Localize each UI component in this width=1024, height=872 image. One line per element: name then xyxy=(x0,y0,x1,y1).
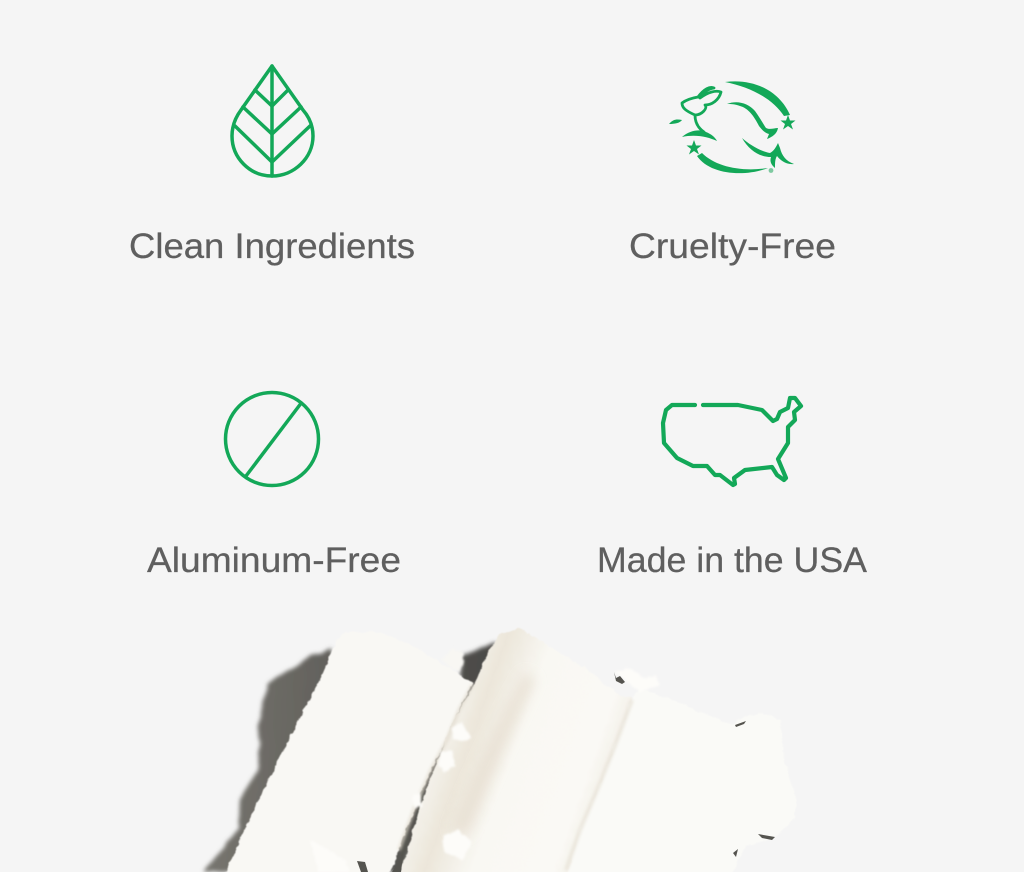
photo: soap bars xyxy=(206,628,795,872)
feature: aluminum-free xyxy=(147,392,401,580)
soft crease on bar two xyxy=(450,672,536,835)
crumbs xyxy=(310,668,660,872)
icon: leaping rabbit xyxy=(669,81,796,173)
bar two xyxy=(398,628,632,872)
bar one xyxy=(222,632,473,872)
icon: prohibited circle xyxy=(226,392,318,486)
label: made in the usa: Made in the USA xyxy=(597,541,868,580)
label: aluminum-free: Aluminum-Free xyxy=(147,541,401,580)
cast shadow xyxy=(206,642,500,872)
feature: made in the usa xyxy=(597,398,868,580)
dark nicks at edges xyxy=(357,672,775,872)
icon: leaf xyxy=(232,66,313,176)
feature: clean ingredients xyxy=(129,66,415,266)
flake behind bars xyxy=(441,649,464,672)
seam between bars one and two xyxy=(399,684,473,850)
label: cruelty-free: Cruelty-Free xyxy=(629,227,836,266)
bar three xyxy=(560,688,795,872)
icon: usa map outline xyxy=(663,398,801,485)
label: clean ingredients: Clean Ingredients xyxy=(129,227,415,266)
icon: rabbit head outline xyxy=(682,87,721,132)
feature: cruelty-free xyxy=(629,81,836,266)
seam between bars two and three xyxy=(566,700,632,870)
